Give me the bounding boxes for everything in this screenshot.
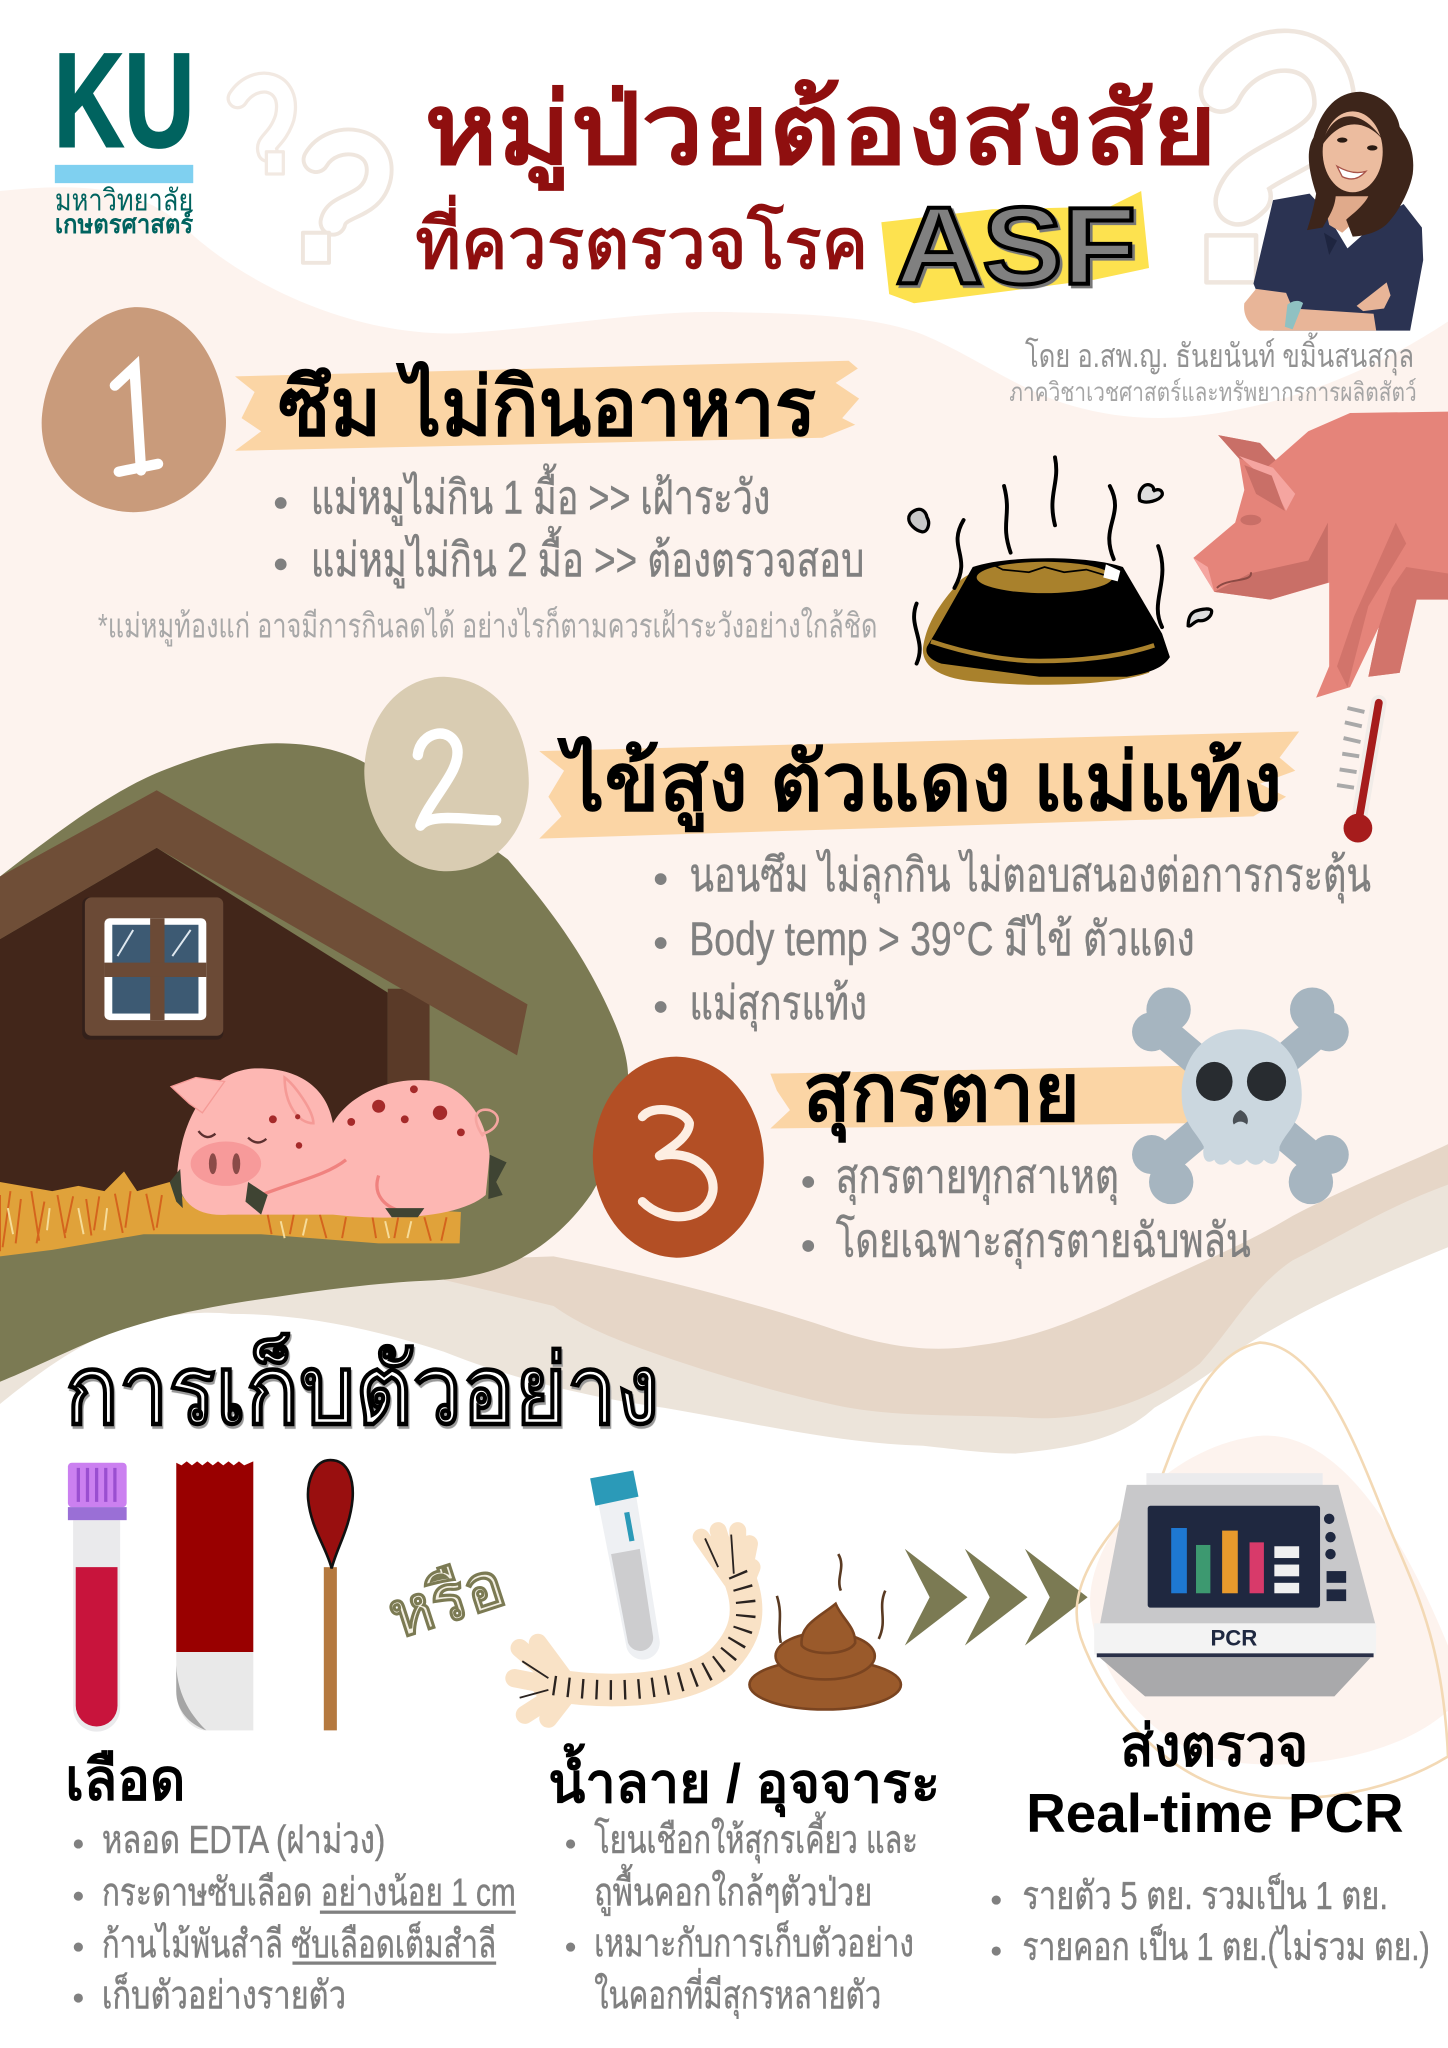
icon: feces — [749, 1554, 901, 1709]
icon: PCR machine — [1094, 1473, 1376, 1696]
heading: blood: เลือด — [65, 1749, 185, 1813]
heading stroke 2 — [539, 732, 1299, 839]
icon: blood tube — [68, 1463, 127, 1732]
heading stroke 1 — [235, 361, 859, 451]
icon: chew rope — [514, 1531, 752, 1719]
panel: PCR testing — [992, 1715, 1430, 1969]
list: blood: เก็บตัวอย่างรายตัว — [102, 1971, 346, 2017]
heading 3: สุกรตาย — [803, 1049, 1080, 1144]
ASF badge: ASF — [896, 186, 1136, 308]
bullets 2 — [655, 848, 1371, 1032]
number badge 3 — [593, 1057, 764, 1258]
list: blood: หลอด EDTA (ฝาม่วง) — [102, 1819, 385, 1862]
heading 2: ไข้สูง ตัวแดง แม่แท้ง — [556, 735, 1282, 833]
KU logo: มหาวิทยาลัย — [55, 185, 193, 218]
barn wall — [0, 848, 388, 1195]
bullets 1: แม่หมูไม่กิน 2 มื้อ >> ต้องตรวจสอบ — [311, 526, 864, 589]
panel: saliva and feces samples — [548, 1743, 940, 2019]
illustration: olive hill and barn — [0, 743, 628, 1382]
icon: thermometer — [1337, 703, 1379, 843]
heading: PCR: Real-time PCR — [1026, 1782, 1404, 1844]
KU logo — [54, 26, 195, 239]
list: saliva and feces: ในคอกที่มีสุกรหลายตัว — [594, 1967, 881, 2019]
arrows — [905, 1549, 1088, 1646]
list: saliva and feces — [566, 1811, 918, 2019]
barn window — [82, 897, 223, 1040]
list: saliva and feces: ถูพื้นคอกใกล้ๆตัวป่วย — [594, 1863, 872, 1915]
heading: PCR — [1026, 1715, 1404, 1844]
panel: blood samples — [65, 1749, 516, 2017]
list: blood: กระดาษซับเลือด อย่างน้อย 1 cm — [102, 1871, 516, 1914]
bullets 1: แม่หมูไม่กิน 1 มื้อ >> เฝ้าระวัง — [311, 463, 770, 526]
icon: blood swab — [308, 1460, 353, 1730]
number badge 1 — [42, 307, 226, 512]
author credit — [1009, 332, 1417, 407]
list: blood — [74, 1819, 516, 2017]
KU logo: KU — [54, 26, 195, 176]
bullets 2: แม่สุกรแท้ง — [689, 976, 867, 1032]
or label: หรือ — [379, 1547, 513, 1652]
presenter photo — [1244, 92, 1423, 331]
bullets 2: Body temp > 39°C มีไข้ ตัวแดง — [689, 912, 1195, 965]
section heading: sample collection: การเก็บตัวอย่าง — [65, 1333, 659, 1445]
barn roof — [0, 790, 527, 1055]
PCR backdrop blob — [1090, 1436, 1448, 1765]
bullets 3: สุกรตายทุกสาเหตุ — [836, 1149, 1119, 1205]
list: blood: ก้านไม้พันสำลี ซับเลือดเต็มสำลี — [102, 1921, 496, 1967]
icon: pig standing — [1193, 412, 1448, 698]
barn post — [388, 989, 430, 1106]
PCR outline curve — [1077, 1343, 1448, 1798]
title: ที่ควรตรวจโรค — [415, 195, 868, 283]
list: PCR — [992, 1872, 1430, 1969]
panel: symptom 1 — [42, 307, 877, 647]
bullets 3 — [802, 1149, 1251, 1269]
icon: skull and crossbones — [1132, 987, 1349, 1204]
panel: symptom 2 — [364, 677, 1371, 1032]
sick pig lying — [170, 1068, 507, 1218]
heading: PCR: ส่งตรวจ — [1120, 1715, 1308, 1779]
heading 1: ซึม ไม่กินอาหาร — [278, 360, 816, 453]
bullets 3: โดยเฉพาะสุกรตายฉับพลัน — [836, 1213, 1251, 1269]
heading: saliva and feces: น้ำลาย / อุจจาระ — [548, 1743, 940, 1818]
icon: blood filter paper — [176, 1461, 253, 1730]
bullets 1 — [275, 463, 864, 589]
icon: PCR machine: PCR — [1210, 1626, 1257, 1651]
decorative question marks — [238, 51, 1334, 282]
KU logo: เกษตรศาสตร์ — [55, 209, 193, 239]
list: saliva and feces: เหมาะกับการเก็บตัวอย่าง — [594, 1919, 914, 1965]
icon: food bowl — [909, 457, 1212, 685]
icon: saliva tube — [590, 1471, 660, 1660]
title: หมู่ป่วยต้องสงสัย — [424, 75, 1217, 192]
straw bed — [0, 1172, 461, 1256]
note: *แม่หมูท้องแก่ อาจมีการกินลดได้ อย่างไรก็ตามควรเฝ้าระวังอย่างใกล้ชิด — [98, 606, 877, 647]
number badge 2 — [364, 677, 529, 871]
title — [415, 75, 1217, 308]
heading stroke 3 — [770, 1066, 1188, 1128]
list: saliva and feces: โยนเชือกให้สุกรเคี้ยว และ — [594, 1811, 918, 1864]
panel: symptom 3 — [593, 1049, 1251, 1269]
